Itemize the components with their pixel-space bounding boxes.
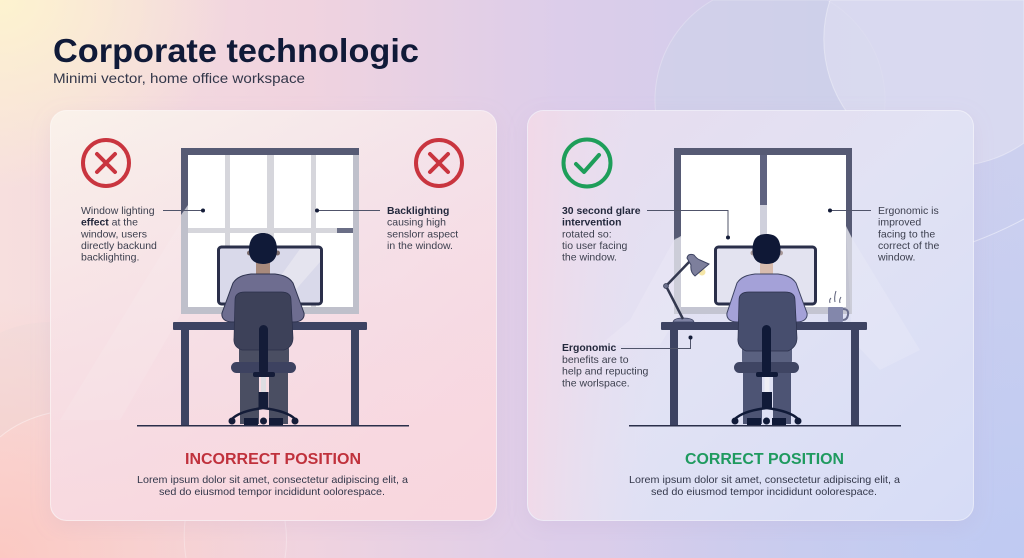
callout: ergonomic benefits: benefits are to xyxy=(562,354,629,366)
person on chair, seen from behind xyxy=(727,234,807,425)
subtitle: Minimi vector, home office workspace xyxy=(53,70,305,86)
window with muntins xyxy=(181,148,359,314)
floor line xyxy=(629,425,901,426)
description: incorrect xyxy=(137,475,408,498)
callout: ergonomic improved: correct of the xyxy=(878,240,939,252)
window xyxy=(674,148,852,314)
icon: red cross right xyxy=(416,140,462,186)
icon: green check xyxy=(564,140,610,186)
heading: incorrect position: INCORRECT POSITION xyxy=(185,451,361,468)
callout: ergonomic benefits: help and repucting xyxy=(562,366,649,378)
desk xyxy=(173,322,367,425)
callout: ergonomic improved: Ergonomic is xyxy=(878,205,939,217)
callout: ergonomic improved: improved xyxy=(878,217,921,229)
callout: ergonomic benefits xyxy=(562,336,692,389)
callout: ergonomic benefits: the worlspace. xyxy=(562,377,630,389)
callout: backlighting xyxy=(315,206,458,252)
callout: backlighting: senslorr aspect xyxy=(387,228,458,240)
callout: window lighting xyxy=(80,205,205,264)
light beam xyxy=(60,222,181,420)
title: Corporate technologic xyxy=(53,32,419,69)
callout: window lighting: directly backund xyxy=(81,240,157,252)
callout: window lighting: effect at the xyxy=(81,217,138,229)
callout: window lighting: backlighting. xyxy=(81,252,139,264)
floor line xyxy=(137,425,409,426)
icon: desk lamp xyxy=(664,254,709,322)
panel: correct position xyxy=(528,110,974,520)
callout: backlighting: Backlighting xyxy=(387,206,449,217)
callout: glare intervention: the window. xyxy=(562,252,617,264)
icon: coffee mug xyxy=(828,291,848,322)
desk xyxy=(661,322,867,425)
callout: glare intervention: tio user facing xyxy=(562,240,628,252)
panel: incorrect position xyxy=(50,110,496,520)
person on chair, seen from behind xyxy=(222,233,304,425)
callout: glare intervention: 30 second glare xyxy=(562,206,641,217)
description: correct: Lorem ipsum dolor sit amet, consectetur adipiscing elit, a xyxy=(629,475,900,486)
callout: window lighting: Window lighting xyxy=(81,205,155,217)
monitor xyxy=(218,247,322,304)
callout: ergonomic improved: window. xyxy=(877,252,915,264)
description: correct xyxy=(629,475,900,498)
heading: correct position: CORRECT POSITION xyxy=(685,451,844,468)
monitor xyxy=(716,247,816,304)
description: incorrect: sed do eiusmod tempor incididunt oolorespace. xyxy=(159,487,385,498)
callout: glare intervention: intervention xyxy=(562,218,621,229)
callout: ergonomic benefits: Ergonomic xyxy=(562,343,616,354)
callout: window lighting: window, users xyxy=(80,228,147,240)
callout: ergonomic improved: facing to the xyxy=(878,228,935,240)
callout: backlighting: causing high xyxy=(387,217,446,229)
icon: red cross left xyxy=(83,140,129,186)
callout: glare intervention: rotated so: xyxy=(562,228,612,240)
light beams xyxy=(600,228,920,370)
description: incorrect: Lorem ipsum dolor sit amet, consectetur adipiscing elit, a xyxy=(137,475,408,486)
callout: backlighting: in the window. xyxy=(387,240,453,252)
callout: ergonomic improved xyxy=(828,205,939,264)
description: correct: sed do eiusmod tempor incididunt oolorespace. xyxy=(651,487,877,498)
callout: glare intervention xyxy=(562,206,730,264)
